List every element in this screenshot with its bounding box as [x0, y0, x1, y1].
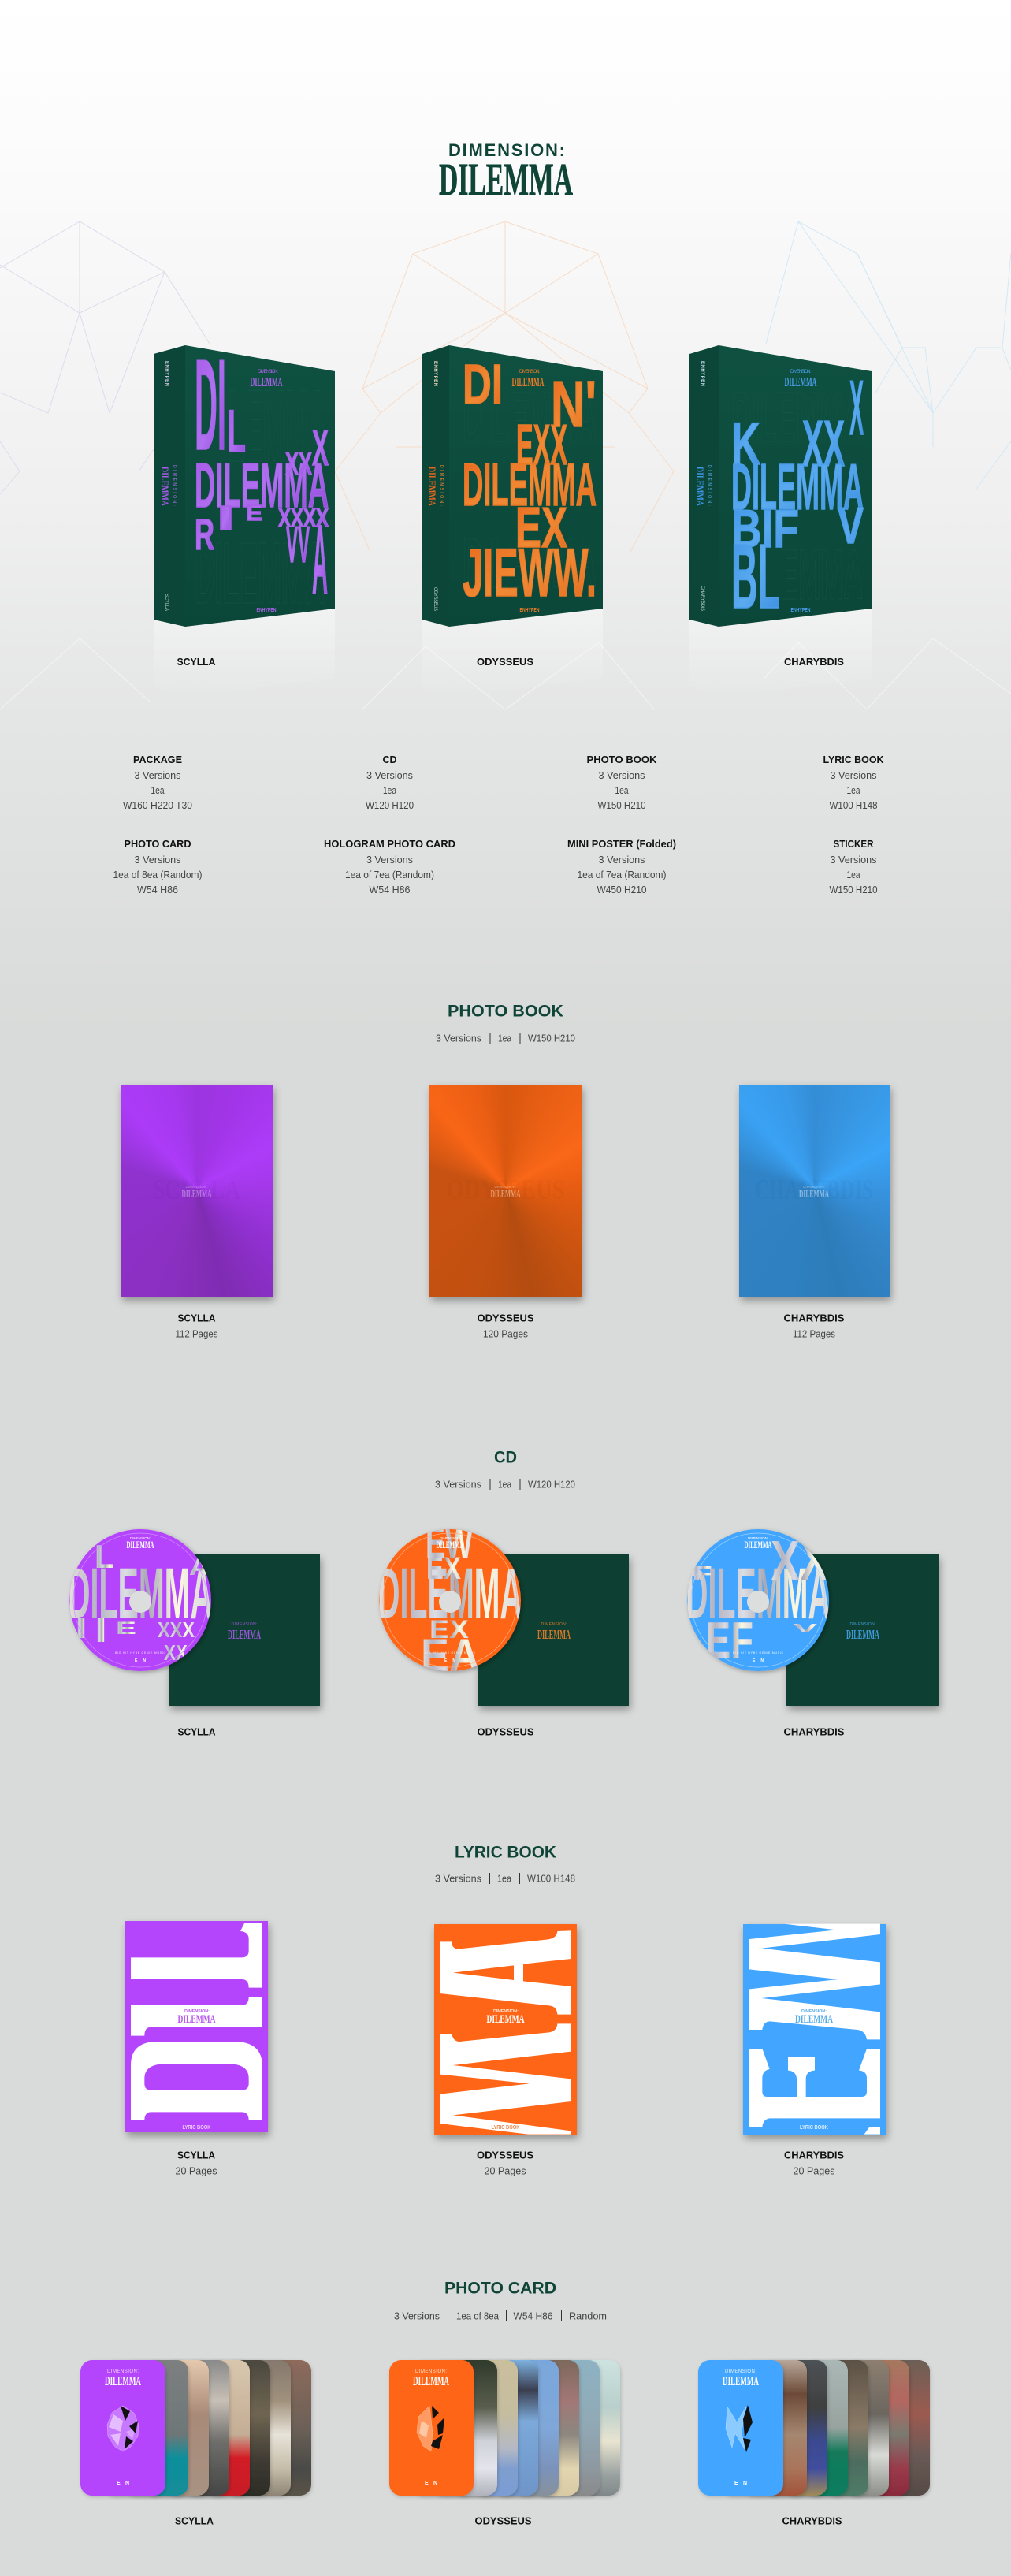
photo card labels: ODYSSEUS: [474, 2515, 532, 2527]
disc: BIG HIT HYBE GENIE MUSIC: [115, 1651, 165, 1655]
cd set: Scylla: DILEMMA: [68, 1554, 213, 1634]
disc: EN: [753, 1658, 764, 1663]
orange letters: EXX: [516, 414, 567, 477]
disc: XX: [771, 1530, 829, 1593]
small front text: DIMENSION:: [258, 370, 278, 374]
ghost lettering: [731, 378, 864, 615]
text: A: [312, 505, 328, 615]
lyric book: Charybdis: DIMENSION:: [801, 2009, 827, 2014]
heading: photo card: PHOTO CARD: [444, 2280, 556, 2297]
cd set: Odysseus: [377, 1517, 629, 1706]
photo book labels: 112 Pages: [793, 1327, 835, 1340]
front card: DILEMMA: [105, 2373, 141, 2388]
spec: cd: W120 H120: [366, 799, 414, 811]
purple letters: X: [312, 419, 329, 476]
front card: EN: [425, 2481, 437, 2486]
photo card specs: 1ea of 8ea: [456, 2310, 500, 2322]
spec: hologram photo card: HOLOGRAM PHOTO CARD: [324, 838, 455, 850]
sleeve: DILEMMA: [228, 1627, 261, 1642]
photo book: Odysseus: DILEMMA: [490, 1189, 521, 1201]
spec: cd: [366, 754, 414, 811]
blue letters: V: [838, 497, 864, 554]
purple letters: R: [195, 509, 214, 559]
photo book specs: [436, 1033, 575, 1044]
front card: [389, 2360, 474, 2496]
disc: XX: [164, 1640, 188, 1665]
photo book: Charybdis: CHARYBDIS: [755, 1174, 873, 1205]
cd set: Charybdis: [686, 1529, 939, 1706]
spec: sticker: 3 Versions: [831, 854, 877, 865]
photo book labels: SCYLLA: [178, 1312, 216, 1324]
spine text: ENHYPEN: [700, 361, 704, 386]
photo card stack: Odysseus: [389, 2360, 620, 2496]
orange letters: N': [551, 367, 597, 441]
disc: [686, 1529, 831, 1671]
package: Scylla box: DILEMMA: [159, 467, 171, 506]
sleeve: DILEMMA: [846, 1627, 879, 1642]
small front text: [251, 370, 283, 613]
cd set: Scylla: [68, 1529, 320, 1706]
blue letters: K: [731, 411, 760, 478]
photo book labels: 120 Pages: [483, 1327, 528, 1340]
spec: hologram photo card: W54 H86: [369, 884, 410, 895]
front card: DILEMMA: [413, 2373, 449, 2388]
heading: photo book: PHOTO BOOK: [448, 1003, 563, 1020]
wireframe: orange: [335, 221, 674, 552]
small front text: [512, 370, 545, 613]
sleeve: DIMENSION:: [541, 1622, 567, 1627]
wireframe: purple: [0, 221, 210, 494]
spec: mini poster: 3 Versions: [599, 854, 645, 865]
spec: photo card: 1ea of 8ea (Random): [113, 869, 202, 880]
disc: DIMENSION:: [130, 1536, 151, 1540]
spec: lyric book: LYRIC BOOK: [823, 754, 884, 765]
package: Scylla box: DIMENSION:: [172, 465, 177, 506]
small front text: ENHYPEN: [257, 608, 276, 613]
lyric book specs: 3 Versions: [435, 1873, 481, 1884]
package: Scylla box: SCYLLA: [164, 594, 169, 611]
cd labels: [178, 1726, 845, 1737]
blue letters: BL: [731, 525, 780, 627]
cd specs: 3 Versions: [435, 1479, 481, 1490]
cd set: Odysseus: DILEMMA: [377, 1554, 522, 1634]
spec: lyric book: 3 Versions: [831, 769, 877, 781]
title: DIMENSION: DILEMMA: DIMENSION:: [448, 140, 565, 160]
lyric book labels: 20 Pages: [484, 2165, 526, 2177]
lyric book labels: CHARYBDIS: [784, 2149, 844, 2161]
photo book: Scylla: DIMENSION:: [186, 1185, 208, 1189]
photo book: Odysseus: [429, 1085, 582, 1297]
front card: [698, 2360, 783, 2496]
gem icon: [726, 2405, 753, 2452]
spec: lyric book: W100 H148: [829, 799, 878, 811]
spec: cd: 3 Versions: [366, 769, 413, 781]
disc: [378, 1528, 523, 1675]
package: Scylla box: [154, 333, 335, 698]
disc: EX: [426, 1551, 461, 1586]
lyric book: Scylla: DILEMMA: [178, 2013, 216, 2026]
spec: mini poster: [567, 838, 676, 895]
front card: DILEMMA: [723, 2373, 759, 2388]
disc: DIMENSION:: [440, 1536, 460, 1540]
package: Charybdis box: DIMENSION:: [707, 465, 712, 506]
front card: DIMENSION:: [725, 2369, 756, 2374]
disc: EW: [426, 1517, 473, 1567]
spec: package: [123, 754, 192, 811]
lyric book: Odysseus: DILEMMA: [487, 2013, 525, 2026]
disc: BIG HIT HYBE GENIE MUSIC: [425, 1651, 475, 1655]
lyric book: Odysseus: [434, 1924, 577, 2135]
lyric book labels: 20 Pages: [793, 2165, 835, 2177]
sleeve: DILEMMA: [537, 1627, 571, 1642]
lyric book specs: [435, 1873, 575, 1884]
orange letters: DI: [463, 354, 503, 416]
heading: lyric book: LYRIC BOOK: [455, 1843, 556, 1862]
package: Odysseus box: DILEMMA: [512, 374, 545, 389]
disc: XXX: [158, 1617, 195, 1642]
lyric book: Charybdis: LYRIC BOOK: [800, 2125, 828, 2131]
spec: package: 3 Versions: [134, 769, 181, 781]
package: Odysseus box: DILEMMA: [426, 467, 438, 506]
disc: I: [95, 1611, 107, 1650]
lyric book: Odysseus: DIMENSION:: [493, 2009, 519, 2014]
front card: [80, 2360, 165, 2496]
lyric book: Scylla: DIMENSION:: [184, 2009, 210, 2014]
spec: sticker: 1ea: [846, 869, 860, 880]
package labels: CHARYBDIS: [784, 656, 844, 668]
spec: photo book: PHOTO BOOK: [586, 754, 657, 765]
disc: [68, 1529, 213, 1671]
blue letters: XX: [802, 407, 845, 480]
package: Charybdis box: [689, 345, 872, 698]
disc: EF: [706, 1611, 753, 1669]
disc: F: [692, 1562, 712, 1585]
package: Odysseus box: DILEMMA: [463, 452, 597, 519]
cd labels: CHARYBDIS: [783, 1726, 845, 1737]
purple letters: DI: [195, 333, 226, 477]
photo book: Odysseus: ODYSSEUS: [446, 1174, 564, 1205]
package labels: SCYLLA: [177, 656, 216, 668]
spec: photo book: W150 H210: [597, 799, 646, 811]
spec: cd: 1ea: [383, 784, 397, 796]
purple letters: XX: [285, 447, 312, 482]
blue letters: BIF: [731, 499, 799, 559]
package: Odysseus box: ODYSSEUS: [433, 587, 437, 611]
lyric book: Odysseus: LYRIC BOOK: [492, 2125, 520, 2131]
photo card stack: Charybdis: [698, 2360, 930, 2496]
front card: DIMENSION:: [107, 2369, 139, 2374]
title: DIMENSION: DILEMMA: DILEMMA: [439, 154, 573, 205]
cd specs: 1ea: [498, 1479, 512, 1490]
disc: A: [189, 1554, 210, 1580]
purple letters: VV: [286, 516, 310, 573]
wireframe: lower white reflection: [0, 638, 1011, 709]
photo book: Charybdis: DIMENSION:: [803, 1185, 825, 1189]
ghost lettering: [463, 378, 597, 603]
photo card specs: W54 H86: [514, 2310, 553, 2322]
spec: package: PACKAGE: [133, 754, 182, 765]
title: DIMENSION: DILEMMA: [439, 140, 573, 205]
photo card labels: [175, 2515, 842, 2527]
spec: hologram photo card: 1ea of 7ea (Random): [345, 869, 434, 880]
photo book labels: [175, 1312, 845, 1340]
disc: DIMENSION:: [748, 1536, 768, 1540]
small front text: DIMENSION:: [790, 370, 811, 374]
photo book: Odysseus: DIMENSION:: [495, 1185, 517, 1189]
photo book: Scylla: [121, 1085, 273, 1297]
photo book: Charybdis: [739, 1085, 890, 1297]
purple letters: I: [217, 499, 235, 538]
spec table: [113, 754, 884, 895]
photo card specs: 3 Versions: [394, 2310, 440, 2322]
purple letters: [195, 333, 329, 615]
package: Charybdis box: DILEMMA: [694, 467, 706, 506]
text: X: [849, 364, 864, 451]
spec: sticker: W150 H210: [829, 884, 878, 895]
disc: EX: [429, 1615, 470, 1644]
spine text: ENHYPEN: [433, 361, 437, 386]
lyric book specs: 1ea: [497, 1873, 512, 1884]
photo card specs: [394, 2310, 607, 2322]
package: Odysseus box: DIMENSION:: [439, 465, 444, 506]
spec: mini poster: MINI POSTER (Folded): [567, 838, 676, 850]
spec: package: W160 H220 T30: [123, 799, 192, 811]
lyric book labels: SCYLLA: [177, 2149, 216, 2161]
text: EMMA: [780, 536, 863, 615]
ghost lettering: [195, 368, 327, 622]
cd labels: ODYSSEUS: [478, 1726, 534, 1737]
photo book specs: 1ea: [498, 1033, 512, 1044]
photo book: Scylla: DILEMMA: [181, 1189, 212, 1201]
photo card labels: CHARYBDIS: [782, 2515, 842, 2527]
disc: EN: [444, 1658, 455, 1663]
spec: lyric book: 1ea: [846, 784, 860, 796]
spec: sticker: STICKER: [834, 838, 874, 850]
photo card stack: Scylla: [80, 2360, 311, 2496]
sleeve: [169, 1554, 320, 1706]
cd labels: SCYLLA: [178, 1726, 216, 1737]
photo book: Charybdis: DILEMMA: [799, 1189, 829, 1201]
front card: EN: [734, 2481, 747, 2486]
spec: photo card: W54 H86: [137, 884, 178, 895]
spec: hologram photo card: [324, 838, 455, 895]
disc: BIG HIT HYBE GENIE MUSIC: [733, 1651, 783, 1655]
lyric book: Charybdis: [743, 1924, 886, 2135]
package: Charybdis box: CHARYBDIS: [700, 586, 704, 611]
photo book specs: W150 H210: [528, 1033, 575, 1044]
photo book: Scylla: SCYLLA: [153, 1174, 240, 1205]
lyric book: Scylla: [125, 1921, 268, 2132]
spec: photo book: 1ea: [615, 784, 629, 796]
wireframe: blue: [766, 221, 1011, 489]
cd specs: [435, 1479, 575, 1490]
spec: package: 1ea: [151, 784, 165, 796]
spec: cd: CD: [383, 754, 397, 765]
photo book labels: 112 Pages: [175, 1327, 218, 1340]
spec: photo card: 3 Versions: [134, 854, 181, 865]
spec: hologram photo card: 3 Versions: [366, 854, 413, 865]
lyric book specs: W100 H148: [527, 1873, 575, 1884]
lyric book: Scylla: LYRIC BOOK: [183, 2125, 211, 2131]
gem icon: [417, 2406, 444, 2451]
spec: photo card: PHOTO CARD: [125, 838, 191, 850]
text: DILEMMA: [463, 524, 597, 603]
purple letters: E: [246, 501, 262, 525]
cd specs: W120 H120: [528, 1479, 575, 1490]
photo book labels: ODYSSEUS: [478, 1312, 534, 1324]
spec: sticker: [829, 838, 878, 895]
spine text: ENHYPEN: [164, 361, 169, 386]
gem icon: [107, 2406, 139, 2451]
front card: DIMENSION:: [415, 2369, 447, 2374]
photo book labels: CHARYBDIS: [783, 1312, 845, 1324]
sleeve: [478, 1554, 629, 1706]
orange letters: JIEWW.: [463, 535, 597, 611]
photo book specs: 3 Versions: [436, 1033, 481, 1044]
front card: EN: [117, 2481, 129, 2486]
text: DILEMMA: [195, 525, 325, 622]
package labels: [177, 656, 844, 668]
spec: photo book: 3 Versions: [599, 769, 645, 781]
lyric book labels: [175, 2149, 844, 2177]
package: Charybdis box: DILEMMA: [785, 374, 817, 389]
photo card labels: SCYLLA: [175, 2515, 214, 2527]
spec: photo book: [586, 754, 657, 811]
orange letters: EX: [515, 497, 567, 560]
photo card specs: Random: [569, 2310, 607, 2322]
package labels: ODYSSEUS: [477, 656, 533, 668]
lyric book labels: ODYSSEUS: [477, 2149, 533, 2161]
purple letters: L: [227, 398, 246, 465]
disc: EN: [135, 1658, 146, 1663]
heading: cd: CD: [494, 1449, 517, 1466]
lyric book labels: 20 Pages: [175, 2165, 217, 2177]
spec: lyric book: [823, 754, 884, 811]
small front text: DIMENSION:: [519, 370, 540, 374]
text: LEMMA: [229, 368, 327, 483]
lyric book: Charybdis: DILEMMA: [795, 2013, 833, 2026]
disc: L: [95, 1538, 114, 1575]
blue letters: [731, 364, 864, 627]
purple letters: XXXX: [278, 504, 329, 532]
small front text: [785, 370, 817, 613]
sleeve: DIMENSION:: [232, 1622, 257, 1627]
small front text: ENHYPEN: [791, 608, 810, 613]
spec: mini poster: W450 H210: [597, 884, 646, 895]
sleeve: [786, 1554, 939, 1706]
text: DILEMMA: [195, 450, 329, 520]
package: Scylla box: DILEMMA: [251, 374, 283, 389]
sleeve: DIMENSION:: [849, 1622, 876, 1627]
spec: photo card: [113, 838, 202, 895]
disc: I: [75, 1612, 87, 1644]
disc: EA: [421, 1630, 480, 1681]
disc: E: [116, 1618, 136, 1638]
disc: DILEMMA: [744, 1539, 772, 1550]
package: Odysseus box: [422, 345, 603, 698]
orange letters: [463, 354, 597, 611]
text: DILEMMA: [463, 378, 597, 457]
disc: DILEMMA: [126, 1539, 154, 1550]
disc: V: [794, 1622, 818, 1636]
disc: DILEMMA: [437, 1539, 464, 1550]
small front text: ENHYPEN: [520, 608, 539, 613]
spec: mini poster: 1ea of 7ea (Random): [577, 869, 667, 880]
